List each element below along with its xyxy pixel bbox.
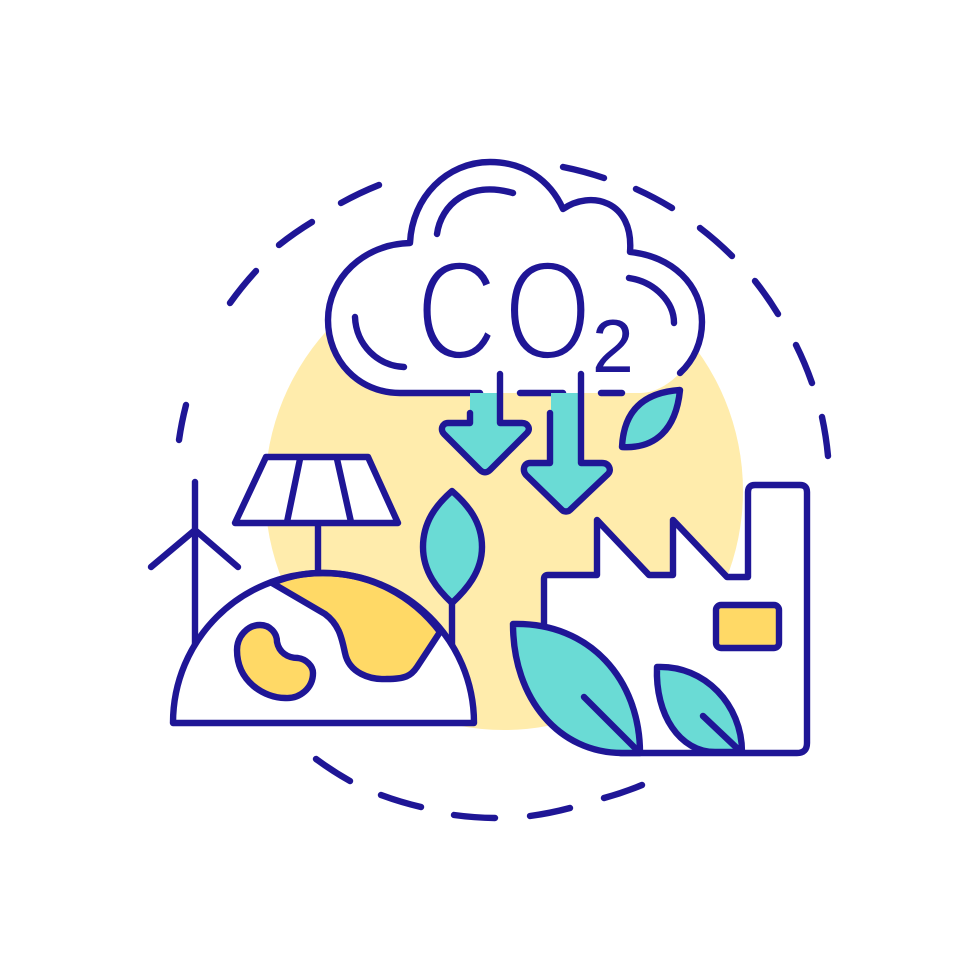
large leaf [513,624,640,753]
wind turbine [151,482,238,645]
floating leaf [622,390,680,447]
cloud inner arcs [355,189,674,367]
continent [272,573,440,679]
bean continent [237,625,313,698]
left down arrow [442,374,529,472]
small leaf [657,667,742,752]
small leaf vein [703,716,740,751]
dome fill [173,573,474,723]
panel dividers [287,459,351,522]
sprout leaf behind globe [423,491,482,645]
factory [513,485,807,753]
globe dome [173,573,474,723]
dashed outer ring [179,167,828,818]
factory building [544,485,807,753]
cloud with CO2 label [328,162,702,393]
background yellow circle [265,252,743,730]
sprout stem [449,603,455,645]
subscript 2 text: 2 [592,304,634,388]
left arrow outline [442,374,529,472]
CO text: CO [416,232,598,390]
right arrow outline [524,374,610,512]
cloud base dashes [520,390,622,396]
sprout leaf [423,491,482,603]
large leaf vein [584,697,638,751]
cloud white fill [328,162,702,393]
panel frame [235,457,398,523]
cloud outline [328,162,702,393]
right down arrow [524,374,610,512]
factory window [716,605,779,648]
panel post [315,523,321,575]
right arrow teal fill [524,393,610,512]
dome outline [173,573,474,723]
solar panel [235,457,398,575]
left arrow teal fill [442,393,529,472]
